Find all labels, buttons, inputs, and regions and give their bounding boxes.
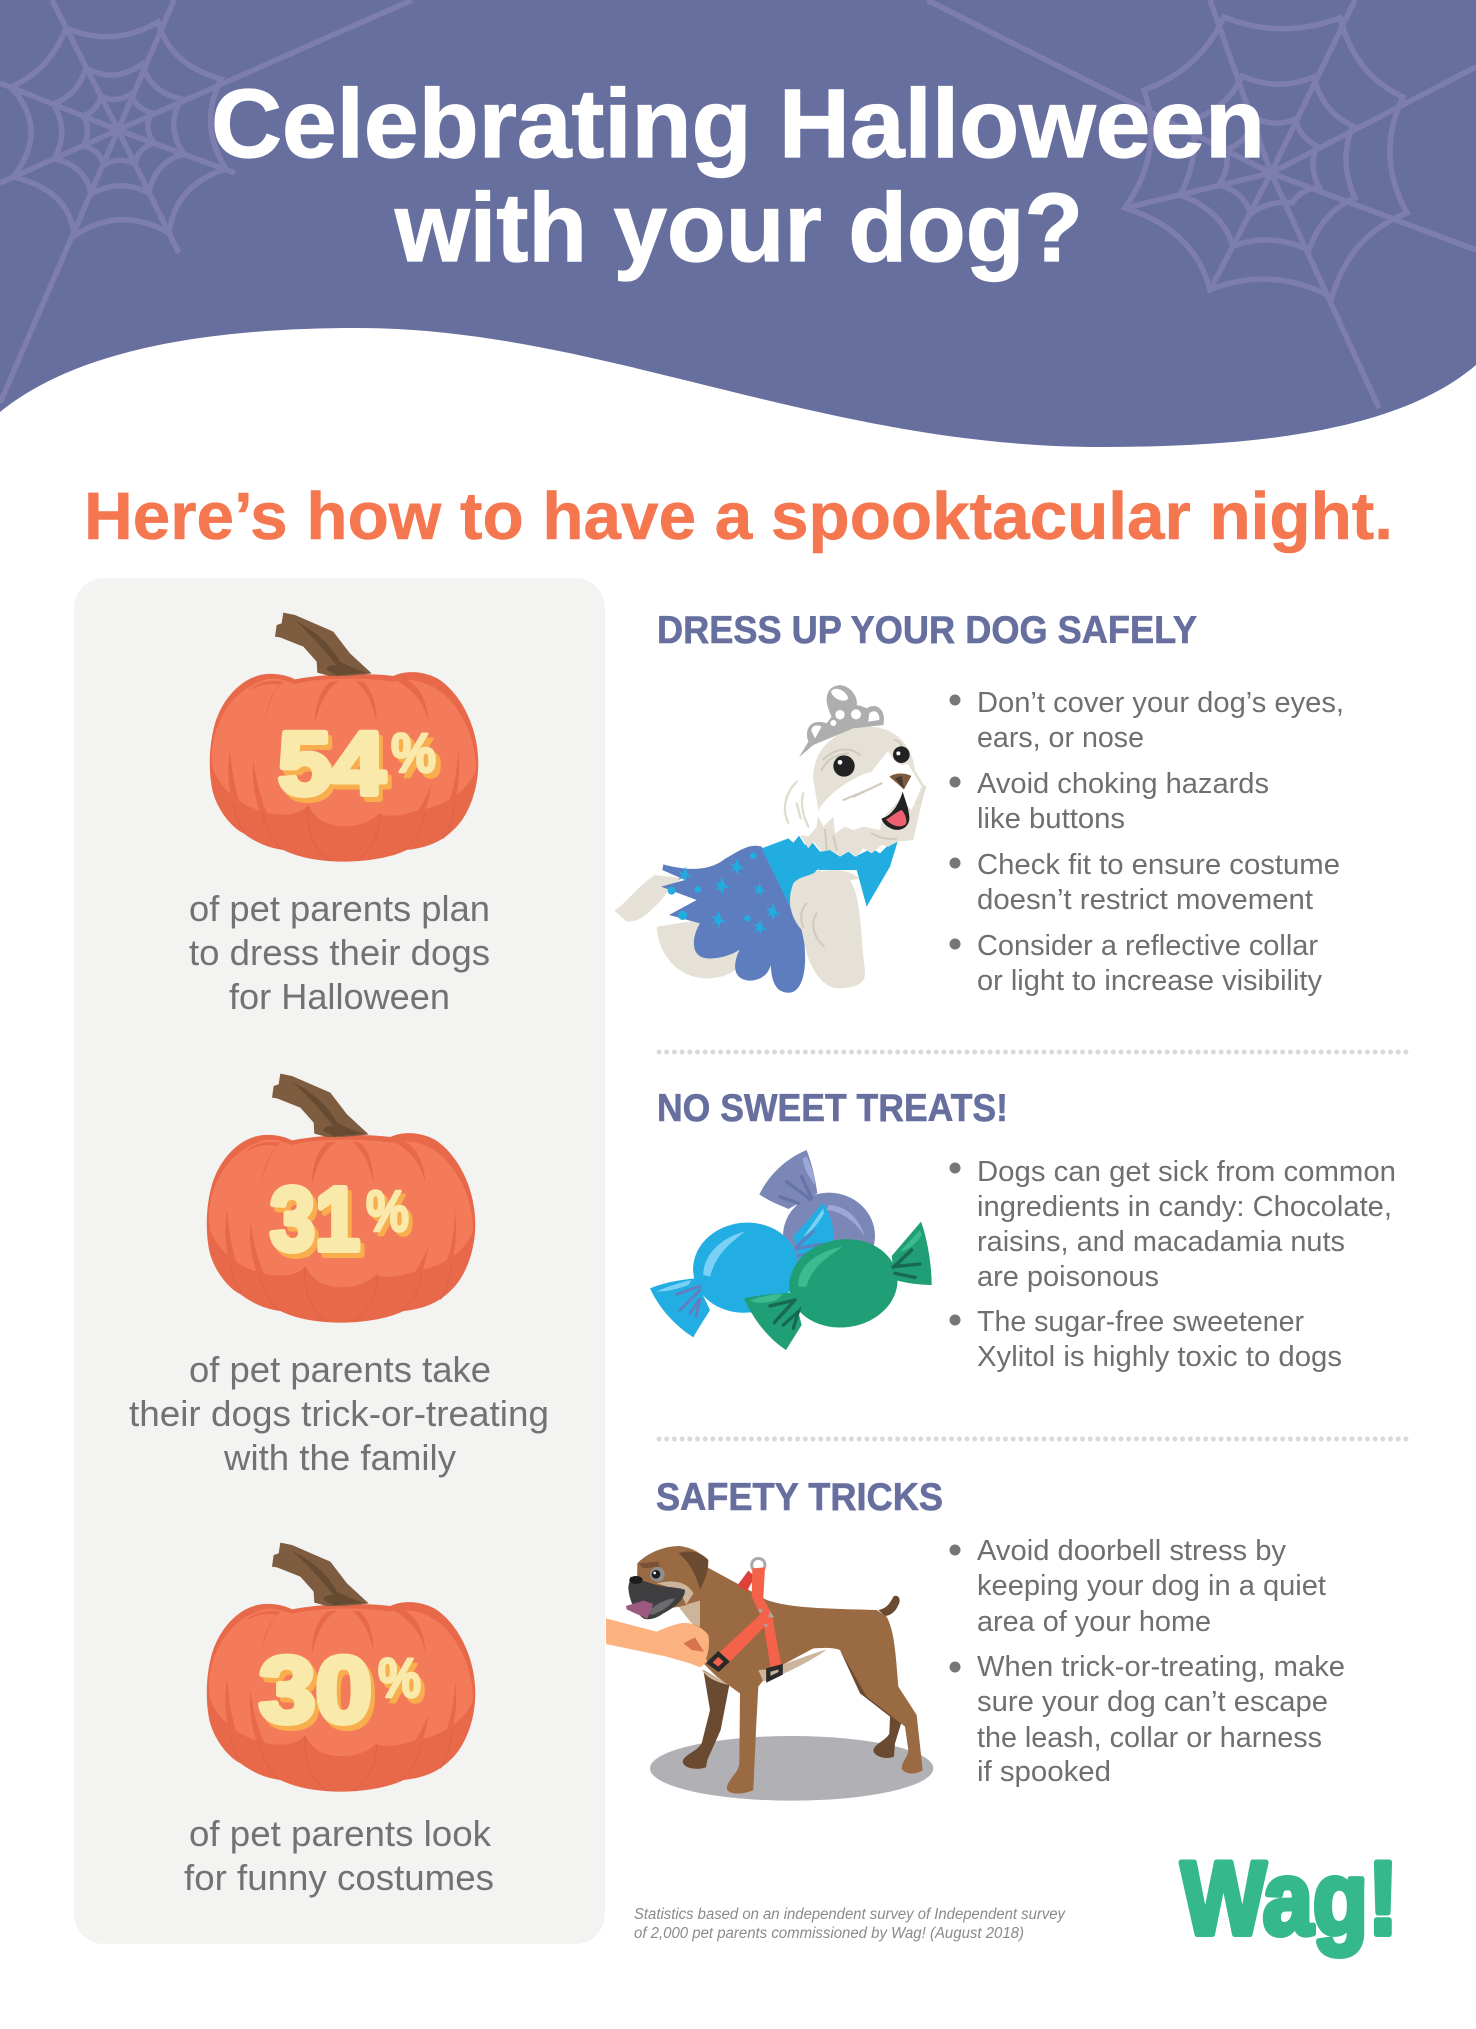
- bullet list: no sweet treats: [950, 1156, 1396, 1373]
- footnote: of 2,000 pet parents commissioned by Wag! (August 2018): [634, 1925, 1024, 1942]
- title: [211, 69, 1265, 282]
- bullet list: dress up: Consider a reflective collar: [977, 930, 1318, 962]
- bullet list: safety tricks: sure your dog can’t escape: [977, 1686, 1328, 1718]
- bullet list: no sweet treats: are poisonous: [977, 1261, 1159, 1293]
- pumpkin stat 30%: %: [378, 1646, 421, 1709]
- pumpkin stat 54%: %: [396, 726, 441, 789]
- bullet list: dress up: or light to increase visibility: [977, 965, 1322, 997]
- bullet list: dress up: doesn’t restrict movement: [977, 884, 1313, 916]
- pumpkin stat 54%: %: [391, 721, 436, 784]
- icon: white dog in costume and tiara: [614, 685, 925, 993]
- pumpkin stat 31%: 31: [274, 1175, 364, 1275]
- label: 31% stat text: of pet parents take: [189, 1349, 491, 1390]
- title: Celebrating Halloween: [211, 69, 1265, 178]
- bullet list: no sweet treats: raisins, and macadamia nuts: [977, 1226, 1345, 1258]
- logo: Wag!: Wag!: [1181, 1841, 1398, 1957]
- bullet list: dress up: Don’t cover your dog’s eyes,: [977, 687, 1344, 719]
- icon: boxer dog with harness and hand: [606, 1546, 933, 1801]
- bullet list: safety tricks: keeping your dog in a quiet: [977, 1570, 1326, 1602]
- bullet list: safety tricks: area of your home: [977, 1606, 1211, 1638]
- label: 54% stat text: [189, 888, 490, 1017]
- bullet list: safety tricks: the leash, collar or harness: [977, 1722, 1322, 1754]
- bullet list: safety tricks: When trick-or-treating, make: [977, 1651, 1345, 1683]
- bullet list: dress up: Check fit to ensure costume: [977, 849, 1340, 881]
- pumpkin stat 31%: %: [366, 1179, 409, 1244]
- bullet list: no sweet treats: The sugar-free sweetener: [977, 1306, 1304, 1338]
- title: with your dog?: [394, 173, 1083, 282]
- icon: left spider web: [0, 0, 412, 403]
- pumpkin stat 54%: 54: [282, 718, 390, 818]
- panel: statistics: [74, 578, 605, 1944]
- label: 31% stat text: [129, 1349, 549, 1478]
- label: 30% stat text: of pet parents look: [189, 1813, 492, 1854]
- subheading: Here’s how to have a spooktacular night.: [84, 479, 1393, 554]
- bullet list: dress up: [950, 687, 1344, 997]
- label: 31% stat text: with the family: [223, 1437, 456, 1478]
- pumpkin stat 31%: 31: [270, 1170, 360, 1270]
- footnote: Statistics based on an independent survey of Independent survey: [634, 1906, 1066, 1923]
- bullet list: safety tricks: [950, 1535, 1345, 1788]
- bullet list: no sweet treats: ingredients in candy: Chocolate,: [977, 1191, 1392, 1223]
- pumpkin stat 30%: [207, 1543, 475, 1792]
- icon: wrapped candies: [650, 1150, 932, 1350]
- bullet list: safety tricks: Avoid doorbell stress by: [977, 1535, 1286, 1567]
- bullet list: safety tricks: if spooked: [977, 1756, 1111, 1788]
- label: 31% stat text: their dogs trick-or-treating: [129, 1393, 549, 1434]
- icon: right spider web: [927, 0, 1476, 408]
- label: 30% stat text: [184, 1813, 494, 1898]
- pumpkin stat 30%: 30: [259, 1637, 372, 1742]
- pumpkin stat 31%: [207, 1074, 475, 1323]
- bullet list: no sweet treats: Dogs can get sick from common: [977, 1156, 1396, 1188]
- label: 54% stat text: to dress their dogs: [189, 932, 490, 973]
- bullet list: dress up: Avoid choking hazards: [977, 768, 1269, 800]
- section heading: safety tricks: SAFETY TRICKS: [656, 1476, 943, 1519]
- pumpkin stat 31%: %: [370, 1183, 413, 1248]
- bullet list: dress up: like buttons: [977, 803, 1125, 835]
- pumpkin stat 30%: 30: [263, 1642, 376, 1747]
- pumpkin stat 54%: [210, 613, 478, 862]
- label: 30% stat text: for funny costumes: [184, 1857, 494, 1898]
- pumpkin stat 30%: %: [382, 1651, 425, 1714]
- header banner with cobwebs: [0, 0, 1476, 447]
- bullet list: no sweet treats: Xylitol is highly toxic to dogs: [977, 1341, 1342, 1373]
- bullet list: dress up: ears, or nose: [977, 722, 1144, 754]
- section heading: dress up: DRESS UP YOUR DOG SAFELY: [657, 609, 1197, 652]
- section heading: no sweet treats: NO SWEET TREATS!: [657, 1087, 1008, 1130]
- pumpkin stat 54%: 54: [278, 713, 386, 813]
- label: 54% stat text: of pet parents plan: [189, 888, 490, 929]
- label: 54% stat text: for Halloween: [229, 976, 450, 1017]
- footnote: [634, 1906, 1066, 1942]
